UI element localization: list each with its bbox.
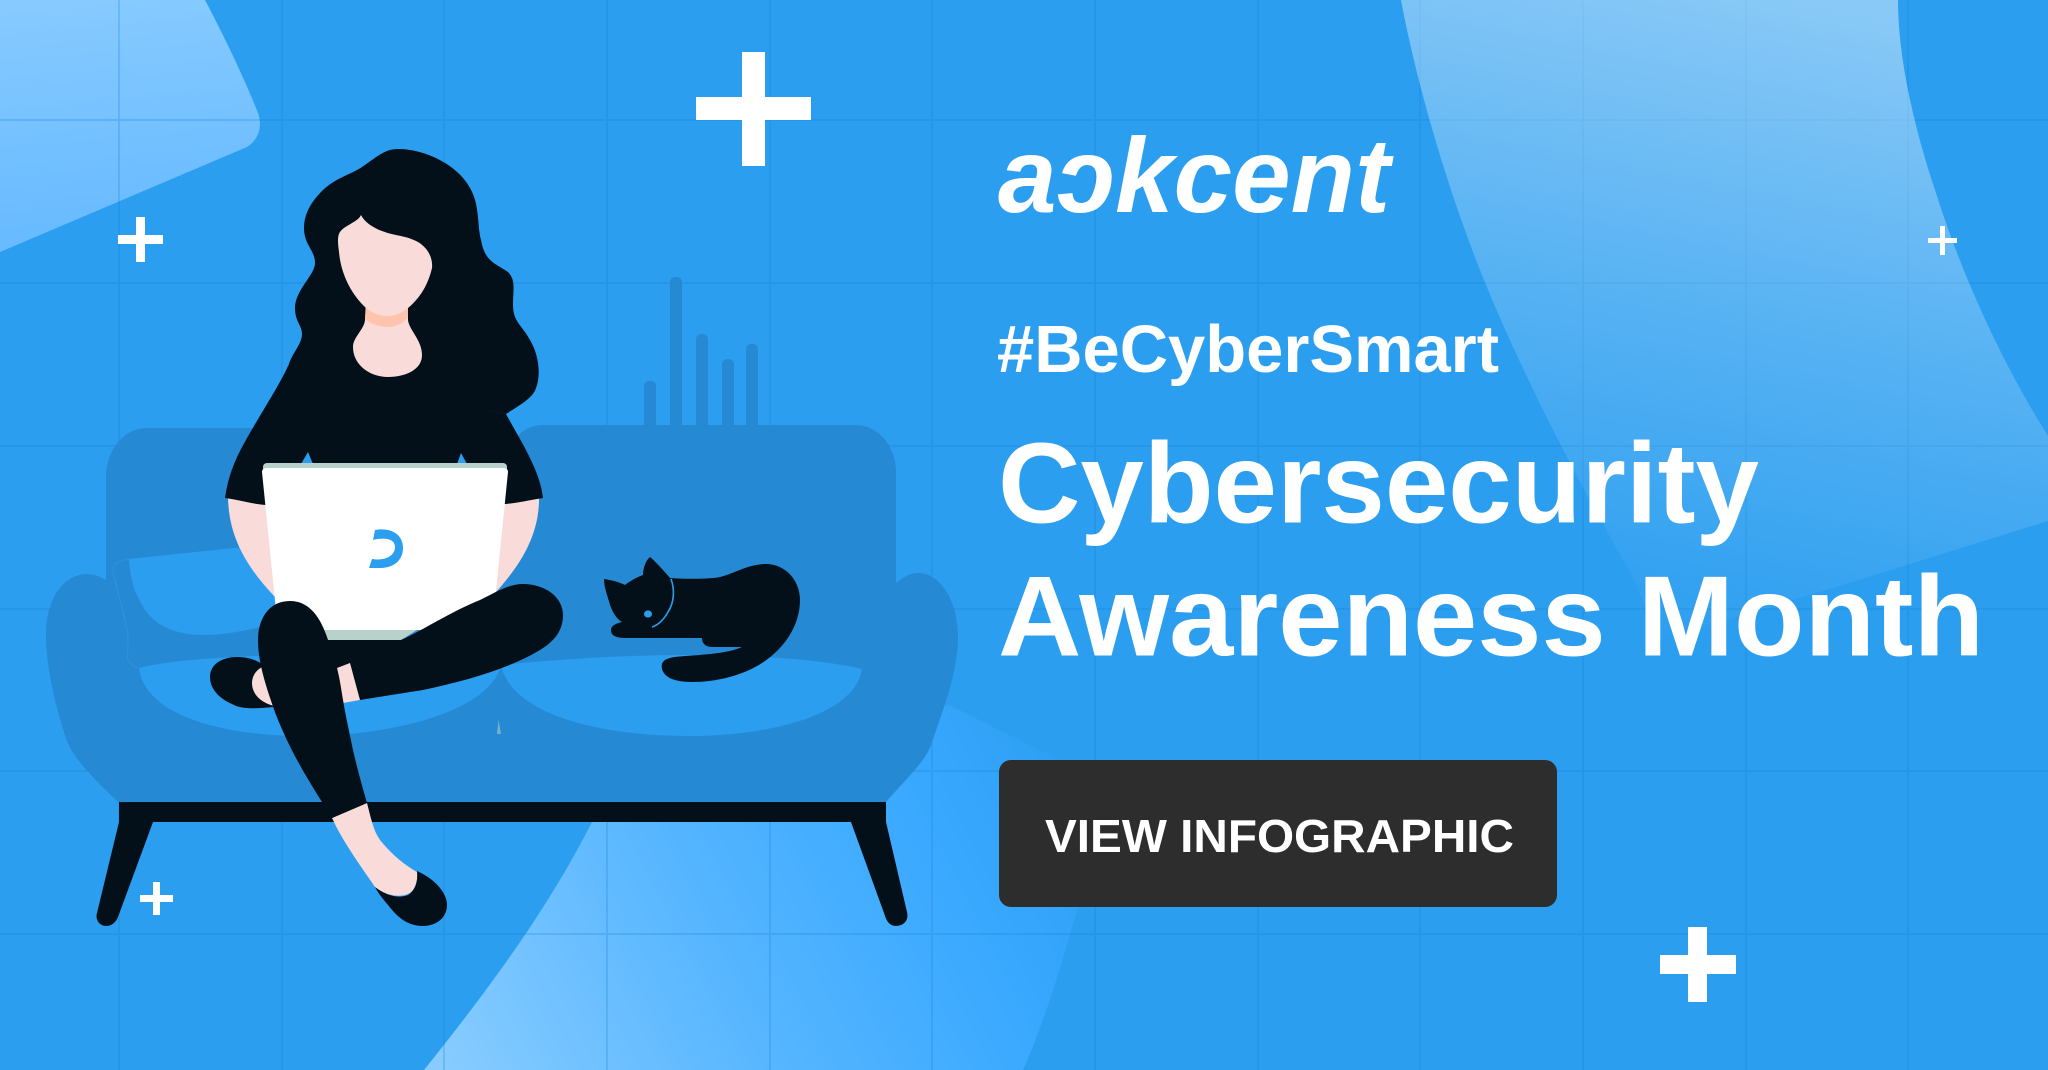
shirt — [225, 366, 543, 505]
illustration: woman on sofa with cat — [46, 149, 958, 926]
left foot — [252, 667, 274, 706]
laptop — [262, 463, 508, 640]
hashtag: #BeCyberSmart — [997, 312, 1499, 387]
sofa — [46, 425, 958, 926]
left shoe — [210, 657, 275, 708]
sofa frame and legs — [96, 802, 907, 926]
shape: bottom light panel — [424, 705, 1100, 1070]
title line 1: Cybersecurity — [998, 420, 1759, 548]
left seat cushion — [139, 655, 501, 736]
cat — [604, 557, 800, 682]
button background — [999, 760, 1557, 907]
cat eye — [644, 610, 652, 618]
cat collar — [652, 579, 673, 627]
title line 2: Awareness Month — [998, 554, 1984, 680]
sleeve gaps — [301, 452, 467, 464]
title — [998, 420, 1984, 680]
face — [338, 215, 432, 316]
neck — [353, 305, 422, 377]
button: view infographic — [999, 760, 1557, 907]
sofa body — [46, 425, 958, 802]
laptop logo — [369, 529, 403, 568]
hair — [288, 149, 539, 414]
bar chart behind sofa — [644, 277, 758, 431]
cat body — [604, 557, 800, 682]
plus: lower right — [1660, 927, 1736, 1002]
arms — [228, 495, 539, 596]
button label: VIEW INFOGRAPHIC — [1045, 810, 1514, 862]
plus: lower left — [140, 882, 173, 915]
ankle — [337, 663, 360, 703]
calf — [258, 601, 367, 818]
laptop lid — [262, 468, 508, 630]
shape: top-left light panel — [0, 0, 260, 252]
plus: large top — [696, 52, 811, 166]
right foot — [332, 803, 417, 896]
right shoe — [375, 871, 447, 926]
laptop base strip — [320, 630, 417, 640]
back cushion — [129, 541, 300, 635]
neck shadow — [365, 300, 408, 327]
small sofa tick — [497, 720, 501, 734]
shape: right light band — [1401, 0, 2048, 640]
logo: aɔkcent — [998, 117, 1394, 235]
woman — [210, 149, 563, 926]
plus icons — [118, 52, 1957, 1002]
plus: upper left — [118, 217, 163, 262]
laptop top edge — [263, 463, 507, 473]
cushion outline — [113, 559, 138, 668]
right seat cushion — [501, 655, 862, 736]
plus: upper right — [1928, 226, 1957, 255]
thigh — [320, 584, 563, 703]
